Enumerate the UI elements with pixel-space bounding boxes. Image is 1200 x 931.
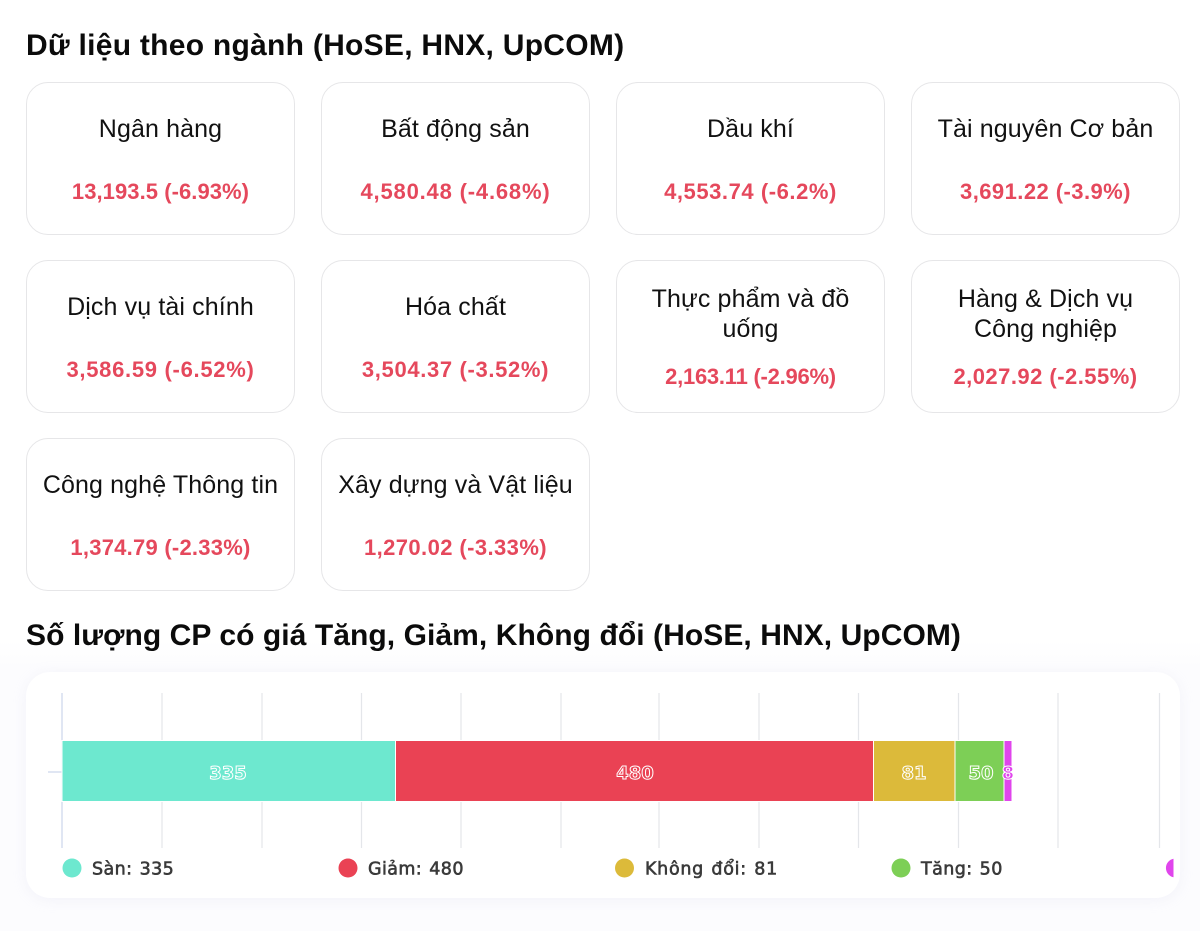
legend: clipped magenta marker bbox=[1166, 859, 1174, 877]
card: Công nghệ Thông tin: 1,374.79 (-2.33%) bbox=[70, 535, 251, 560]
card: Dịch vụ tài chính: 3,586.59 (-6.52%) bbox=[66, 357, 254, 382]
card: Dầu khí bbox=[616, 82, 885, 235]
segment: Sàn 335: 335 bbox=[209, 763, 247, 784]
card: Hàng & Dịch vụ Công nghiệp: Hàng & Dịch vụ bbox=[958, 285, 1133, 313]
card: Dầu khí: Dầu khí bbox=[707, 115, 794, 143]
segment: Trần 8 bbox=[1002, 740, 1014, 802]
segment: Giảm 480: 480 bbox=[616, 763, 654, 784]
segment: Tăng 50: 50 bbox=[968, 763, 994, 784]
segment: Không đổi 81 bbox=[874, 740, 955, 802]
card: Thực phẩm và đồ uống: 2,163.11 (-2.96%) bbox=[665, 364, 836, 389]
segment: Trần 8: 8 bbox=[1002, 763, 1014, 784]
card: Công nghệ Thông tin: Công nghệ Thông tin bbox=[43, 471, 278, 499]
card: Tài nguyên Cơ bản: Tài nguyên Cơ bản bbox=[938, 115, 1153, 143]
card: Bất động sản: 4,580.48 (-4.68%) bbox=[360, 179, 551, 204]
segment: Tăng 50 bbox=[955, 740, 1004, 802]
card: Hàng & Dịch vụ Công nghiệp: 2,027.92 (-2.55%) bbox=[953, 364, 1138, 389]
card: Ngân hàng bbox=[26, 82, 295, 235]
card: Xây dựng và Vật liệu bbox=[321, 438, 590, 591]
legend: Tăng: Tăng: 50 bbox=[920, 860, 1003, 880]
page background band bbox=[0, 640, 1200, 931]
card: Hàng & Dịch vụ Công nghiệp: Công nghiệp bbox=[974, 315, 1117, 343]
segment: Không đổi 81: 81 bbox=[901, 763, 927, 784]
card: Bất động sản bbox=[321, 82, 590, 235]
card: Thực phẩm và đồ uống bbox=[616, 260, 885, 413]
card: Hóa chất: Hóa chất bbox=[405, 293, 506, 321]
card: Dịch vụ tài chính bbox=[26, 260, 295, 413]
segment: Sàn 335 bbox=[62, 740, 396, 802]
legend: Không đổi: Không đổi: 81 bbox=[645, 858, 778, 880]
card: Dầu khí: 4,553.74 (-6.2%) bbox=[664, 179, 837, 204]
card: Bất động sản: Bất động sản bbox=[381, 115, 530, 143]
card: Hàng & Dịch vụ Công nghiệp bbox=[911, 260, 1180, 413]
card: Tài nguyên Cơ bản bbox=[911, 82, 1180, 235]
card: Thực phẩm và đồ uống: uống bbox=[722, 315, 779, 343]
panel: stacked bar chart bbox=[26, 672, 1180, 898]
card: Hóa chất: 3,504.37 (-3.52%) bbox=[362, 357, 549, 382]
card: Công nghệ Thông tin bbox=[26, 438, 295, 591]
card: Xây dựng và Vật liệu: 1,270.02 (-3.33%) bbox=[364, 535, 547, 560]
card: Hóa chất bbox=[321, 260, 590, 413]
card: Ngân hàng: 13,193.5 (-6.93%) bbox=[72, 179, 249, 204]
card: Xây dựng và Vật liệu: Xây dựng và Vật liệu bbox=[338, 471, 573, 499]
heading: stock counts: Số lượng CP có giá Tăng, Giảm, Không đổi (HoSE, HNX, UpCOM) bbox=[26, 619, 961, 652]
segment: Giảm 480 bbox=[396, 740, 874, 802]
legend: Sàn: Sàn: 335 bbox=[92, 860, 174, 880]
card: Dịch vụ tài chính: Dịch vụ tài chính bbox=[67, 293, 254, 321]
card: Thực phẩm và đồ uống: Thực phẩm và đồ bbox=[652, 285, 849, 313]
card: Ngân hàng: Ngân hàng bbox=[99, 115, 222, 143]
legend: Tăng bbox=[892, 858, 1003, 880]
card: Tài nguyên Cơ bản: 3,691.22 (-3.9%) bbox=[960, 179, 1131, 204]
legend: Giảm: Giảm: 480 bbox=[368, 860, 464, 880]
heading: data by sector: Dữ liệu theo ngành (HoSE, HNX, UpCOM) bbox=[26, 29, 624, 62]
